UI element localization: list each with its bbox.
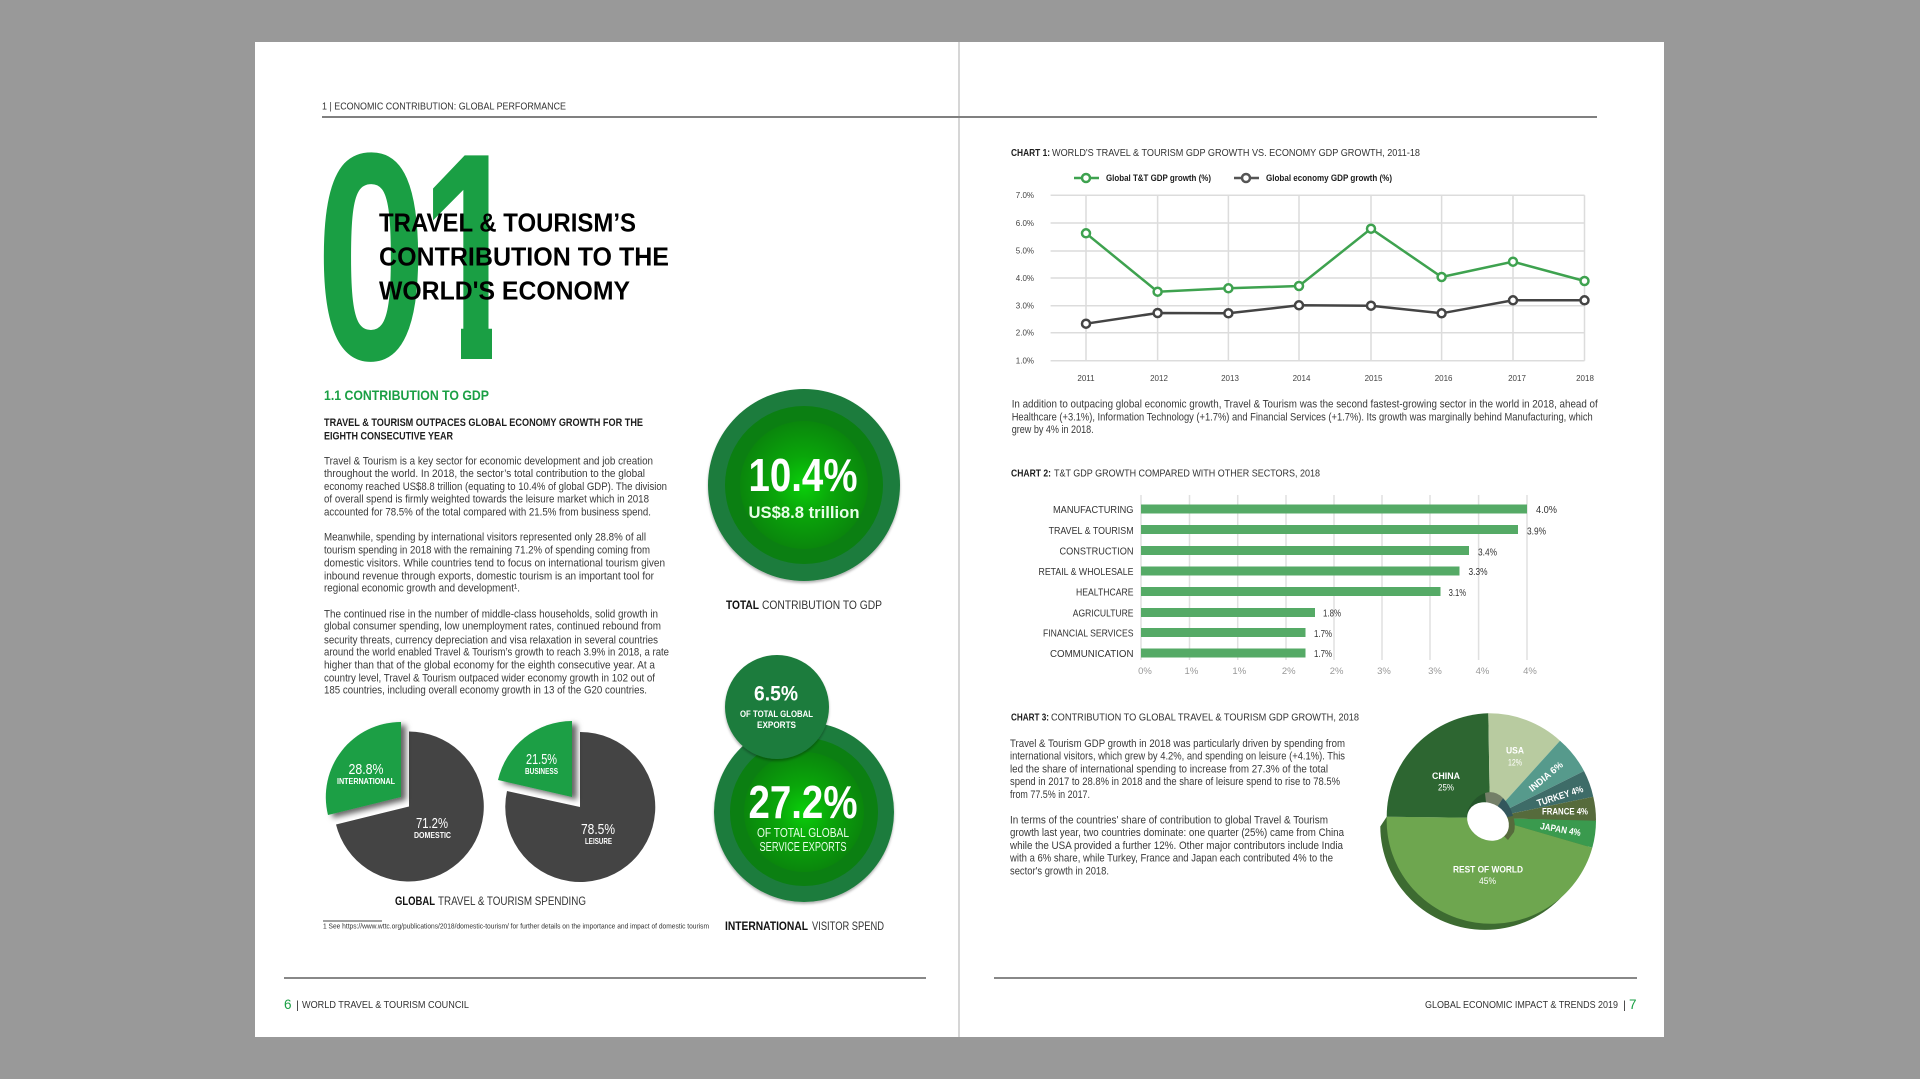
stat circle: international service exports: 27.2% [748, 776, 858, 828]
value labels [1314, 505, 1557, 660]
category labels: AGRICULTURE [1073, 608, 1134, 620]
body text: chart 3 commentary: growth last year, two countries dominate: one quarter (25%) came from China [1010, 827, 1345, 839]
value labels: 1.8% [1323, 608, 1341, 620]
y axis labels: 7.0% [1016, 191, 1034, 200]
chapter title: CONTRIBUTION TO THE [379, 242, 669, 272]
body text: left page: The continued rise in the number of middle-class households, solid growth in [324, 608, 658, 620]
body text: chart 3 commentary: In terms of the countries' share of contribution to global Travel & Tourism [1010, 814, 1328, 826]
value labels: 1.7% [1314, 649, 1332, 660]
category labels: TRAVEL & TOURISM [1049, 525, 1134, 537]
donut labels: FRANCE 4% [1542, 806, 1588, 818]
donut labels: REST OF WORLD [1453, 864, 1523, 876]
body text: chart 3 commentary: with a 6% share, while Turkey, France and Japan each contributed 4% to the [1009, 852, 1333, 864]
axis labels: 1% [1232, 666, 1247, 677]
x axis labels: 2011 [1077, 374, 1095, 383]
stat circle: total contribution to GDP: 10.4% [748, 449, 858, 501]
category labels: CONSTRUCTION [1060, 546, 1134, 558]
series: T&T GDP growth [1082, 225, 1588, 296]
footer: left page [284, 978, 926, 1012]
bar chart [1038, 495, 1557, 677]
y axis labels: 2.0% [1016, 328, 1034, 338]
stat circle: total contribution to GDP: US$8.8 trillion [748, 503, 860, 522]
caption: total contribution to GDP: CONTRIBUTION TO GDP [762, 600, 882, 612]
caption: international visitor spend: VISITOR SPEND [812, 919, 884, 933]
line chart [1016, 191, 1594, 383]
y axis labels: 4.0% [1016, 274, 1034, 283]
pie chart: leisure vs business: 21.5% [526, 751, 557, 768]
footer: left page: WORLD TRAVEL & TOURISM COUNCIL [302, 999, 469, 1011]
category labels: HEALTHCARE [1076, 586, 1134, 598]
stat circle: global exports: OF TOTAL GLOBAL [740, 709, 813, 719]
body text: chart 3 commentary: Travel & Tourism GDP growth in 2018 was particularly driven by spending from [1010, 738, 1345, 750]
axis labels: 2% [1282, 666, 1296, 677]
caption: international visitor spend: INTERNATIONAL [725, 919, 808, 933]
value labels: 3.3% [1468, 567, 1488, 578]
donut labels: TURKEY 4% [1536, 784, 1585, 809]
body text: left page: accounted for 78.5% of the total compared with 21.5% from business spend. [324, 506, 651, 518]
body text: chart 1 commentary: grew by 4% in 2018. [1012, 424, 1094, 436]
y axis labels: 6.0% [1016, 219, 1034, 228]
y axis labels: 5.0% [1016, 246, 1034, 256]
chapter number: 0 [316, 92, 426, 422]
chart 1 legend: Global T&T GDP growth (%) [1106, 173, 1211, 184]
category labels: RETAIL & WHOLESALE [1038, 566, 1134, 578]
body text: chart 3 commentary [1009, 738, 1345, 878]
body text: chart 3 commentary: from 77.5% in 2017. [1010, 789, 1090, 801]
value labels: 4.0% [1536, 505, 1557, 516]
footer: right page [994, 978, 1637, 1012]
bars [1141, 504, 1527, 658]
category labels: FINANCIAL SERVICES [1043, 628, 1134, 640]
chapter number: 1 [420, 92, 523, 423]
x axis labels: 2018 [1576, 374, 1594, 383]
body text: left page: economy reached US$8.8 trillion (equating to 10.4% of global GDP). The division [324, 481, 667, 493]
page background [255, 42, 1664, 1037]
donut labels [1432, 746, 1588, 887]
x axis labels: 2016 [1435, 374, 1453, 383]
x axis labels: 2015 [1365, 374, 1383, 383]
body text: left page: country level, Travel & Tourism outpaced wider economy growth in 102 out of [324, 672, 656, 684]
pie chart: leisure vs business: 78.5% [581, 821, 615, 838]
subheading: TRAVEL & TOURISM OUTPACES GLOBAL ECONOMY GROWTH FOR THE [324, 417, 643, 429]
footer: left page: | [296, 1000, 299, 1012]
body text: left page: tourism spending in 2018 with the remaining 71.2% of spending coming from [324, 544, 650, 556]
x axis labels: 2012 [1150, 374, 1168, 383]
chapter number [324, 152, 492, 362]
body text: left page: higher than that of the global economy for the eighth consecutive year. At a [324, 660, 656, 672]
value labels: 3.1% [1449, 588, 1466, 599]
body text: left page: Travel & Tourism is a key sector for economic development and job creation [324, 456, 653, 468]
caption: global travel and tourism spending: TRAVEL & TOURISM SPENDING [438, 896, 586, 908]
axis labels: 3% [1377, 666, 1391, 677]
chart 1 title: WORLD'S TRAVEL & TOURISM GDP GROWTH VS. ECONOMY GDP GROWTH, 2011-18 [1052, 147, 1420, 159]
body text: left page: global consumer spending, low unemployment rates, continued rebound from [324, 620, 661, 632]
value labels: 3.4% [1478, 548, 1497, 558]
chart 3 title: CHART 3: [1011, 712, 1049, 724]
caption: international visitor spend [725, 919, 884, 933]
body text: left page: 185 countries, including overall economy growth in 13 of the G20 countries. [324, 684, 647, 696]
category labels: MANUFACTURING [1053, 504, 1134, 516]
body text: chart 1 commentary: In addition to outpacing global economic growth, Travel & Tourism was the second fastest-growing sector in the world in 2018, ahead of [1012, 398, 1598, 410]
pie chart: international vs domestic: 71.2% [416, 815, 448, 832]
series: economy GDP growth [1082, 296, 1588, 328]
body text: left page [324, 456, 669, 696]
chapter title: WORLD'S ECONOMY [379, 276, 630, 306]
body text: chart 3 commentary: international visitors, which grew by 4.2%, and spending on leisure (+4.1%). This [1010, 750, 1345, 762]
y axis labels [1016, 191, 1034, 366]
body text: left page: of overall spend is firmly weighted towards the leisure market which in 2018 [324, 494, 649, 506]
footnote: 1 See https://www.wttc.org/publications/2018/domestic-tourism/ for further details on the importance and impact of domestic tourism [323, 924, 709, 930]
x axis labels: 2014 [1293, 374, 1311, 383]
category labels [1038, 504, 1134, 660]
chart 1 legend: Global economy GDP growth (%) [1266, 173, 1392, 184]
body text: left page: domestic visitors. While countries tend to focus on international tourism given [324, 558, 665, 570]
stat circle: international service exports [714, 722, 894, 902]
body text: left page: around the world enabled Travel & Tourism’s growth to reach 3.9% in 2018, a rate [324, 646, 669, 658]
body text: left page: security threats, currency depreciation and visa relaxation in several countries [324, 634, 658, 646]
stat circle: global exports: 6.5% [754, 682, 798, 706]
pie chart: leisure vs business [498, 721, 655, 882]
chart 3 title: CONTRIBUTION TO GLOBAL TRAVEL & TOURISM GDP GROWTH, 2018 [1051, 712, 1359, 724]
caption: global travel and tourism spending: GLOBAL [395, 896, 435, 908]
x axis labels: 2013 [1221, 374, 1239, 383]
stat circle: international service exports: OF TOTAL GLOBAL [757, 825, 849, 840]
axis labels: 4% [1476, 666, 1490, 677]
pie chart: international vs domestic: INTERNATIONAL [337, 777, 395, 786]
donut labels: 45% [1479, 876, 1496, 887]
pie chart: leisure vs business: LEISURE [585, 837, 613, 846]
subheading: EIGHTH CONSECUTIVE YEAR [324, 430, 453, 442]
body text: left page: throughout the world. In 2018, the sector’s total contribution to the global [324, 468, 645, 480]
footer: left page: 6 [284, 997, 292, 1012]
donut labels: CHINA [1432, 771, 1460, 782]
body text: chart 3 commentary: sector's growth in 2018. [1010, 866, 1109, 878]
body text: chart 1 commentary: Healthcare (+3.1%), Information Technology (+1.7%) and Financial Services (+1.7%). Its growth was marginally behind Manufacturing, which [1012, 412, 1593, 424]
axis labels [1138, 666, 1537, 677]
running header: 1 | ECONOMIC CONTRIBUTION: GLOBAL PERFORMANCE [322, 100, 566, 112]
donut labels: 12% [1508, 758, 1522, 768]
body text: left page: regional economic growth and development¹. [324, 582, 520, 594]
axis labels: 2% [1330, 666, 1344, 677]
chart 2 title: T&T GDP GROWTH COMPARED WITH OTHER SECTORS, 2018 [1054, 468, 1320, 480]
3D donut chart [1380, 713, 1596, 930]
body text: chart 3 commentary: led the share of international spending to increase from 27.3% of the total [1010, 764, 1328, 776]
axis labels: 1% [1185, 666, 1199, 677]
chapter title [379, 208, 669, 306]
value labels: 3.9% [1527, 526, 1546, 538]
caption: global travel and tourism spending [395, 896, 586, 908]
body text: chart 3 commentary: while the USA provided a further 12%. Other major contributors include India [1009, 840, 1344, 852]
stat circle: international service exports: SERVICE EXPORTS [760, 839, 847, 854]
pie chart: international vs domestic: DOMESTIC [414, 831, 451, 840]
pie chart: leisure vs business: BUSINESS [525, 767, 559, 776]
body text: chart 3 commentary: spend in 2017 to 28.8% in 2018 and the share of leisure spend to rise to 78.5% [1010, 776, 1340, 788]
caption: total contribution to GDP: TOTAL [726, 600, 759, 612]
category labels: COMMUNICATION [1050, 648, 1134, 660]
pie chart: international vs domestic [326, 722, 484, 881]
donut labels: 25% [1438, 782, 1454, 794]
footer: right page: 7 [1629, 997, 1637, 1012]
x axis labels: 2017 [1508, 374, 1526, 383]
footer: right page: GLOBAL ECONOMIC IMPACT & TRENDS 2019 [1425, 999, 1618, 1011]
footer: right page: | [1623, 1000, 1626, 1012]
body text: left page: inbound revenue through exports, domestic tourism is an important tool for [324, 570, 654, 582]
stat circle: global exports [725, 655, 829, 759]
donut labels: INDIA 6% [1527, 759, 1566, 794]
stat circle: total contribution to GDP [708, 389, 900, 581]
chapter title: TRAVEL & TOURISM’S [379, 208, 636, 238]
value labels: 1.7% [1314, 629, 1332, 640]
subheading [324, 417, 643, 442]
pie chart: international vs domestic: 28.8% [348, 761, 384, 778]
chart 2 title: CHART 2: [1011, 468, 1051, 480]
chart 1 title: CHART 1: [1011, 147, 1050, 159]
section heading: 1.1 CONTRIBUTION TO GDP [324, 387, 489, 403]
axis labels: 3% [1428, 666, 1442, 677]
axis labels: 4% [1523, 666, 1537, 677]
donut labels: JAPAN 4% [1539, 821, 1582, 839]
stat circle: global exports: EXPORTS [757, 720, 796, 730]
x axis labels [1077, 374, 1594, 383]
body text: chart 1 commentary [1012, 398, 1598, 436]
donut labels: USA [1506, 746, 1524, 756]
body text: left page: Meanwhile, spending by international visitors represented only 28.8% of all [324, 532, 646, 544]
y axis labels: 3.0% [1016, 302, 1034, 310]
y axis labels: 1.0% [1016, 356, 1034, 366]
chart 1 legend [1074, 173, 1392, 184]
axis labels: 0% [1138, 666, 1152, 677]
